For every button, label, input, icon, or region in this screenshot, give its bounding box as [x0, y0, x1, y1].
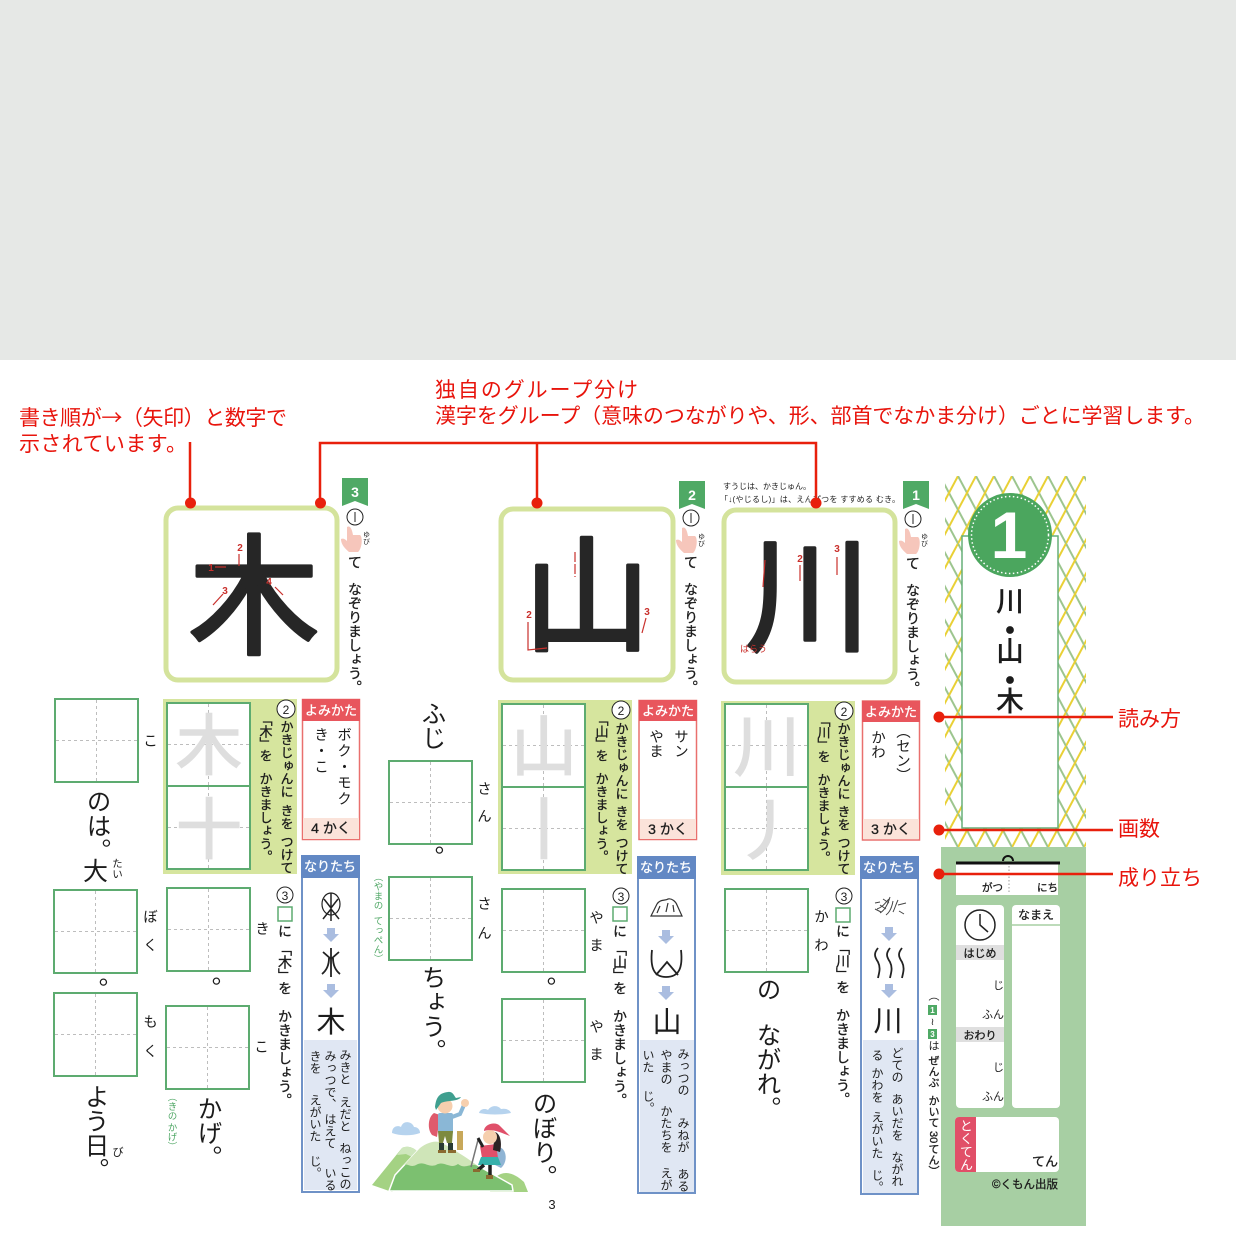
- exercises: ki leaves: 大: [83, 858, 108, 886]
- lesson 1 kawa: [721, 481, 929, 1194]
- origin box: みっつで、: [323, 1050, 337, 1110]
- reading box: [639, 700, 697, 840]
- exercises: ki leaves: よう日。: [82, 1084, 108, 1182]
- exercises: fuji: さ: [475, 781, 491, 796]
- kanji card: 山: [523, 527, 651, 669]
- step 1 heading: ゆび: [698, 533, 705, 547]
- annotation: stroke order: 示されています。: [19, 428, 187, 458]
- step 3: [277, 887, 293, 1107]
- reading box: 3 かく: [871, 821, 911, 837]
- step 2 panel: 川: [734, 710, 800, 784]
- step 2 panel: つけて: [836, 836, 850, 875]
- exercises: ki leaves: ぼ: [141, 909, 157, 924]
- origin box: 木: [316, 1006, 346, 1039]
- step 1 heading: [676, 510, 705, 694]
- kanji card: [724, 510, 895, 682]
- top gray band: [0, 0, 1236, 360]
- origin box: はえて: [323, 1113, 337, 1149]
- origin box: えが: [659, 1167, 673, 1191]
- exercise: [725, 889, 828, 1120]
- time box: ふん: [982, 1090, 1004, 1103]
- step 2 panel: 2: [283, 703, 290, 717]
- time box: じ: [993, 979, 1004, 992]
- exercises: fuji: ちょう。: [418, 965, 446, 1063]
- exercise: ながれ。: [754, 1022, 780, 1120]
- annotation: stroke order: [19, 402, 287, 458]
- copyright: ©くもん出版: [992, 1177, 1058, 1191]
- step 2 panel: 「木」を: [258, 713, 272, 761]
- step 3: に: [835, 924, 851, 938]
- ribbon: 1: [912, 487, 920, 503]
- origin box: あいだを: [890, 1093, 904, 1141]
- kanji card: 2: [237, 543, 243, 554]
- origin box: 川: [873, 1006, 903, 1038]
- step 2 panel: 丨: [511, 793, 577, 867]
- origin box: [637, 856, 696, 1193]
- step 1 heading: [899, 511, 928, 695]
- origin box: どての: [890, 1047, 904, 1083]
- note above kawa card: [720, 482, 900, 504]
- step 2 panel: [163, 699, 297, 874]
- note above kawa card: すうじは、かきじゅん。: [723, 482, 811, 491]
- origin box: [301, 855, 360, 1192]
- date box: にち: [1037, 882, 1058, 894]
- exercises: ki leaves: たい: [111, 858, 123, 879]
- kanji card: 2: [797, 554, 803, 565]
- exercises: ki: （きの: [166, 1092, 177, 1120]
- time box: [956, 905, 1004, 1108]
- step 2 panel: きを: [836, 805, 850, 831]
- exercise: わ: [812, 937, 828, 952]
- step 2 panel: 「川」を: [816, 714, 830, 762]
- step 1 heading: なぞりましょう。: [683, 582, 699, 694]
- step 3: 「山」を: [612, 942, 628, 995]
- exercises: ki leaves: く: [141, 1043, 157, 1058]
- kanji card: はらう: [740, 644, 767, 654]
- score box: とくてん: [958, 1119, 973, 1171]
- label: reading: 読み方: [1118, 703, 1181, 733]
- origin box: やまの: [659, 1049, 673, 1085]
- time box: じ: [993, 1061, 1004, 1074]
- reading box: [862, 701, 920, 840]
- exercises: ki: 。: [194, 976, 220, 1000]
- step 2 panel: つけて: [278, 835, 294, 874]
- score note: 30てん）: [927, 1131, 940, 1176]
- origin box: じ。: [870, 1169, 884, 1193]
- ribbon: [903, 481, 929, 509]
- date box: がつ: [982, 881, 1003, 894]
- step 2 panel: かきじゅんに: [836, 722, 850, 800]
- step 2 panel: [721, 701, 855, 875]
- side tab: title: [996, 587, 1024, 717]
- annotation: original grouping: [435, 374, 1205, 430]
- origin box: る: [870, 1049, 884, 1061]
- exercises: fuji: ん: [475, 925, 491, 940]
- origin box: みっつの: [676, 1048, 690, 1096]
- score note: は: [927, 1040, 939, 1051]
- origin box: えだと: [338, 1096, 352, 1132]
- step 2 panel: かきましょう。: [258, 772, 272, 863]
- kanji card: 1: [208, 563, 214, 574]
- step 1 heading: て: [905, 556, 921, 570]
- illustration: hikers on mountain: [372, 1092, 528, 1192]
- origin box: 山: [652, 1007, 682, 1039]
- exercises: ki leaves: び: [111, 1146, 123, 1158]
- step 2 panel: つけて: [614, 836, 628, 875]
- step 2 panel: かきましょう。: [594, 772, 608, 863]
- exercises: fuji: ん: [475, 808, 491, 822]
- exercises: ki: き: [253, 921, 269, 936]
- side tab: number badge: 1: [991, 498, 1027, 572]
- origin box: じ。: [641, 1090, 655, 1114]
- label: origin: 成り立ち: [1118, 862, 1202, 892]
- score note: 1: [930, 1006, 935, 1015]
- side tab: title: 川: [996, 587, 1024, 617]
- step 3: かきましょう。: [612, 1009, 628, 1107]
- exercises: ま: [587, 1046, 603, 1061]
- step 3: 3: [282, 889, 289, 903]
- exercises: fuji: 。: [416, 845, 444, 870]
- step 2 panel: 木: [176, 709, 242, 783]
- score note: かいて: [927, 1095, 940, 1128]
- step 2 panel: かきじゅんに: [278, 720, 294, 798]
- exercises: fuji: てっぺん）: [372, 916, 383, 964]
- score box: [955, 1117, 1059, 1172]
- origin box: みきと: [338, 1049, 352, 1085]
- side tab: title: 木: [996, 687, 1024, 717]
- step 2 panel: 2: [841, 705, 848, 719]
- origin box: じ。: [308, 1155, 322, 1179]
- page number: 3: [548, 1197, 556, 1212]
- annotation: stroke order: 書き順が→（矢印）と数字で: [19, 402, 287, 432]
- exercises: fuji: （やまの: [372, 872, 383, 910]
- kanji card: 木: [188, 525, 320, 672]
- origin box: かわを: [870, 1067, 884, 1103]
- step 3: 「川」を: [835, 941, 851, 994]
- name box: なまえ: [1018, 908, 1054, 922]
- step 3: 「木」を: [277, 942, 293, 995]
- name box: [1012, 905, 1060, 1108]
- time box: はじめ: [964, 947, 996, 960]
- origin box: きを: [308, 1050, 322, 1074]
- exercises: や: [587, 1019, 603, 1034]
- step 1 heading: [341, 509, 370, 694]
- exercises: fuji: さ: [475, 896, 491, 911]
- step 1 heading: なぞりましょう。: [905, 583, 921, 695]
- exercises: ki leaves: く: [141, 937, 157, 952]
- reading box: よみかた: [642, 704, 694, 718]
- kanji card: 3: [644, 607, 650, 618]
- score note: [927, 990, 940, 1176]
- step 2 panel: 2: [618, 704, 625, 718]
- reading box: （セン）: [894, 724, 910, 782]
- origin box: なりたち: [304, 859, 356, 874]
- origin box: なりたち: [640, 860, 692, 875]
- step 2 panel: かきましょう。: [816, 773, 830, 864]
- lesson 3 ki: [54, 478, 370, 1192]
- side tab: title: 山: [996, 637, 1024, 667]
- step 1 heading: なぞりましょう。: [347, 582, 363, 694]
- origin box: かたちを: [659, 1105, 673, 1153]
- step 2 panel: 丿: [734, 794, 800, 868]
- step 1 heading: ゆび: [362, 531, 370, 545]
- exercises: ki: [166, 888, 269, 1170]
- step 3: [612, 888, 629, 1107]
- score note: ぜんぶ: [927, 1055, 940, 1088]
- step 3: かきましょう。: [277, 1009, 293, 1107]
- origin box: いる: [323, 1167, 337, 1191]
- exercises: ki: かげ。: [194, 1096, 222, 1170]
- reading box: よみかた: [305, 703, 357, 718]
- step 1 heading: て: [683, 555, 699, 569]
- ribbon: [342, 478, 368, 506]
- origin box: ねっこの: [338, 1142, 352, 1190]
- reading box: 4 かく: [311, 820, 351, 836]
- exercise: か: [812, 909, 828, 924]
- step 1 heading: て: [347, 555, 363, 569]
- score note: 3: [930, 1030, 935, 1039]
- red leader lines: [185, 442, 1113, 880]
- lesson 2 yama: [372, 481, 705, 1212]
- reading box: よみかた: [865, 704, 917, 720]
- step 2 panel: 「山」を: [594, 713, 608, 761]
- side tab: number badge: [968, 493, 1052, 577]
- time box: ふん: [982, 1008, 1004, 1021]
- date box: [956, 856, 1060, 895]
- step 1 heading: ゆび: [920, 533, 928, 547]
- ribbon: 2: [688, 487, 696, 503]
- exercises: ki leaves: も: [141, 1014, 157, 1029]
- reading box: かわ: [869, 730, 885, 759]
- label: stroke count: 画数: [1118, 813, 1160, 843]
- kanji card: 4: [266, 577, 272, 588]
- origin box: みねが: [676, 1117, 690, 1153]
- origin box: [860, 856, 919, 1194]
- step 3: に: [612, 924, 628, 938]
- exercises: のぼり。: [530, 1091, 556, 1189]
- ribbon: [679, 481, 705, 509]
- step 2 panel: [498, 700, 632, 875]
- exercise: の: [754, 977, 780, 1002]
- kanji card: 川: [746, 529, 870, 668]
- step 3: かきましょう。: [835, 1008, 851, 1106]
- kanji card: 2: [526, 610, 532, 621]
- exercises: ki leaves: 。: [80, 977, 108, 1002]
- score box: てん: [1032, 1154, 1058, 1169]
- origin box: なりたち: [863, 860, 915, 875]
- step 3: 3: [618, 890, 625, 904]
- origin box: ながれ: [890, 1151, 904, 1187]
- step 3: [835, 888, 852, 1106]
- step 2 panel: 山: [511, 710, 577, 784]
- exercises: ki leaves: [54, 699, 157, 1182]
- origin box: ある: [676, 1168, 690, 1192]
- exercises: fuji: ふじ: [418, 701, 446, 750]
- step 3: 3: [841, 890, 848, 904]
- time box: おわり: [964, 1029, 996, 1042]
- step 2 panel: きを: [614, 805, 628, 831]
- exercises: [502, 889, 603, 1189]
- reading box: やま: [647, 729, 663, 758]
- score note: ≀: [931, 1017, 934, 1028]
- reading box: サン: [672, 729, 688, 758]
- exercises: 。: [528, 976, 556, 1000]
- step 2 panel: きを: [278, 804, 294, 830]
- side tab: lattice header: [945, 476, 1086, 848]
- origin box: えがいた: [308, 1094, 322, 1142]
- exercises: や: [587, 910, 603, 925]
- exercises: ki leaves: のは。: [84, 789, 110, 862]
- exercises: ま: [587, 937, 603, 952]
- exercises: fuji: [372, 701, 491, 1063]
- exercises: ki: こ: [252, 1039, 268, 1054]
- kanji card: [501, 509, 673, 680]
- origin box: えがいた: [870, 1111, 884, 1159]
- kanji card: 3: [834, 544, 840, 555]
- step 2 panel: かきじゅんに: [614, 722, 628, 800]
- score note: （: [927, 990, 940, 1001]
- exercises: ki leaves: こ: [141, 733, 157, 748]
- note above kawa card: 「↓(やじるし)」は、えんぴつを すすめる むき。: [720, 495, 900, 504]
- kanji card: 3: [222, 586, 228, 597]
- step 3: に: [277, 924, 293, 938]
- ribbon: 3: [351, 484, 359, 500]
- exercises: ki: かげ）: [166, 1122, 177, 1150]
- side tab: green record panel: [941, 847, 1086, 1226]
- annotation: original grouping: 漢字をグループ（意味のつながりや、形、部首でなかま分け）ごとに学習します。: [435, 400, 1205, 430]
- reading box: 3 かく: [648, 821, 688, 837]
- reading box: [302, 699, 360, 840]
- origin box: いた: [641, 1049, 655, 1073]
- kanji card: [166, 508, 337, 680]
- annotation: original grouping: 独自のグループ分け: [435, 374, 638, 404]
- reading box: き・こ: [312, 727, 328, 775]
- step 2 panel: 十: [176, 793, 242, 867]
- reading box: ボク・モク: [335, 727, 351, 807]
